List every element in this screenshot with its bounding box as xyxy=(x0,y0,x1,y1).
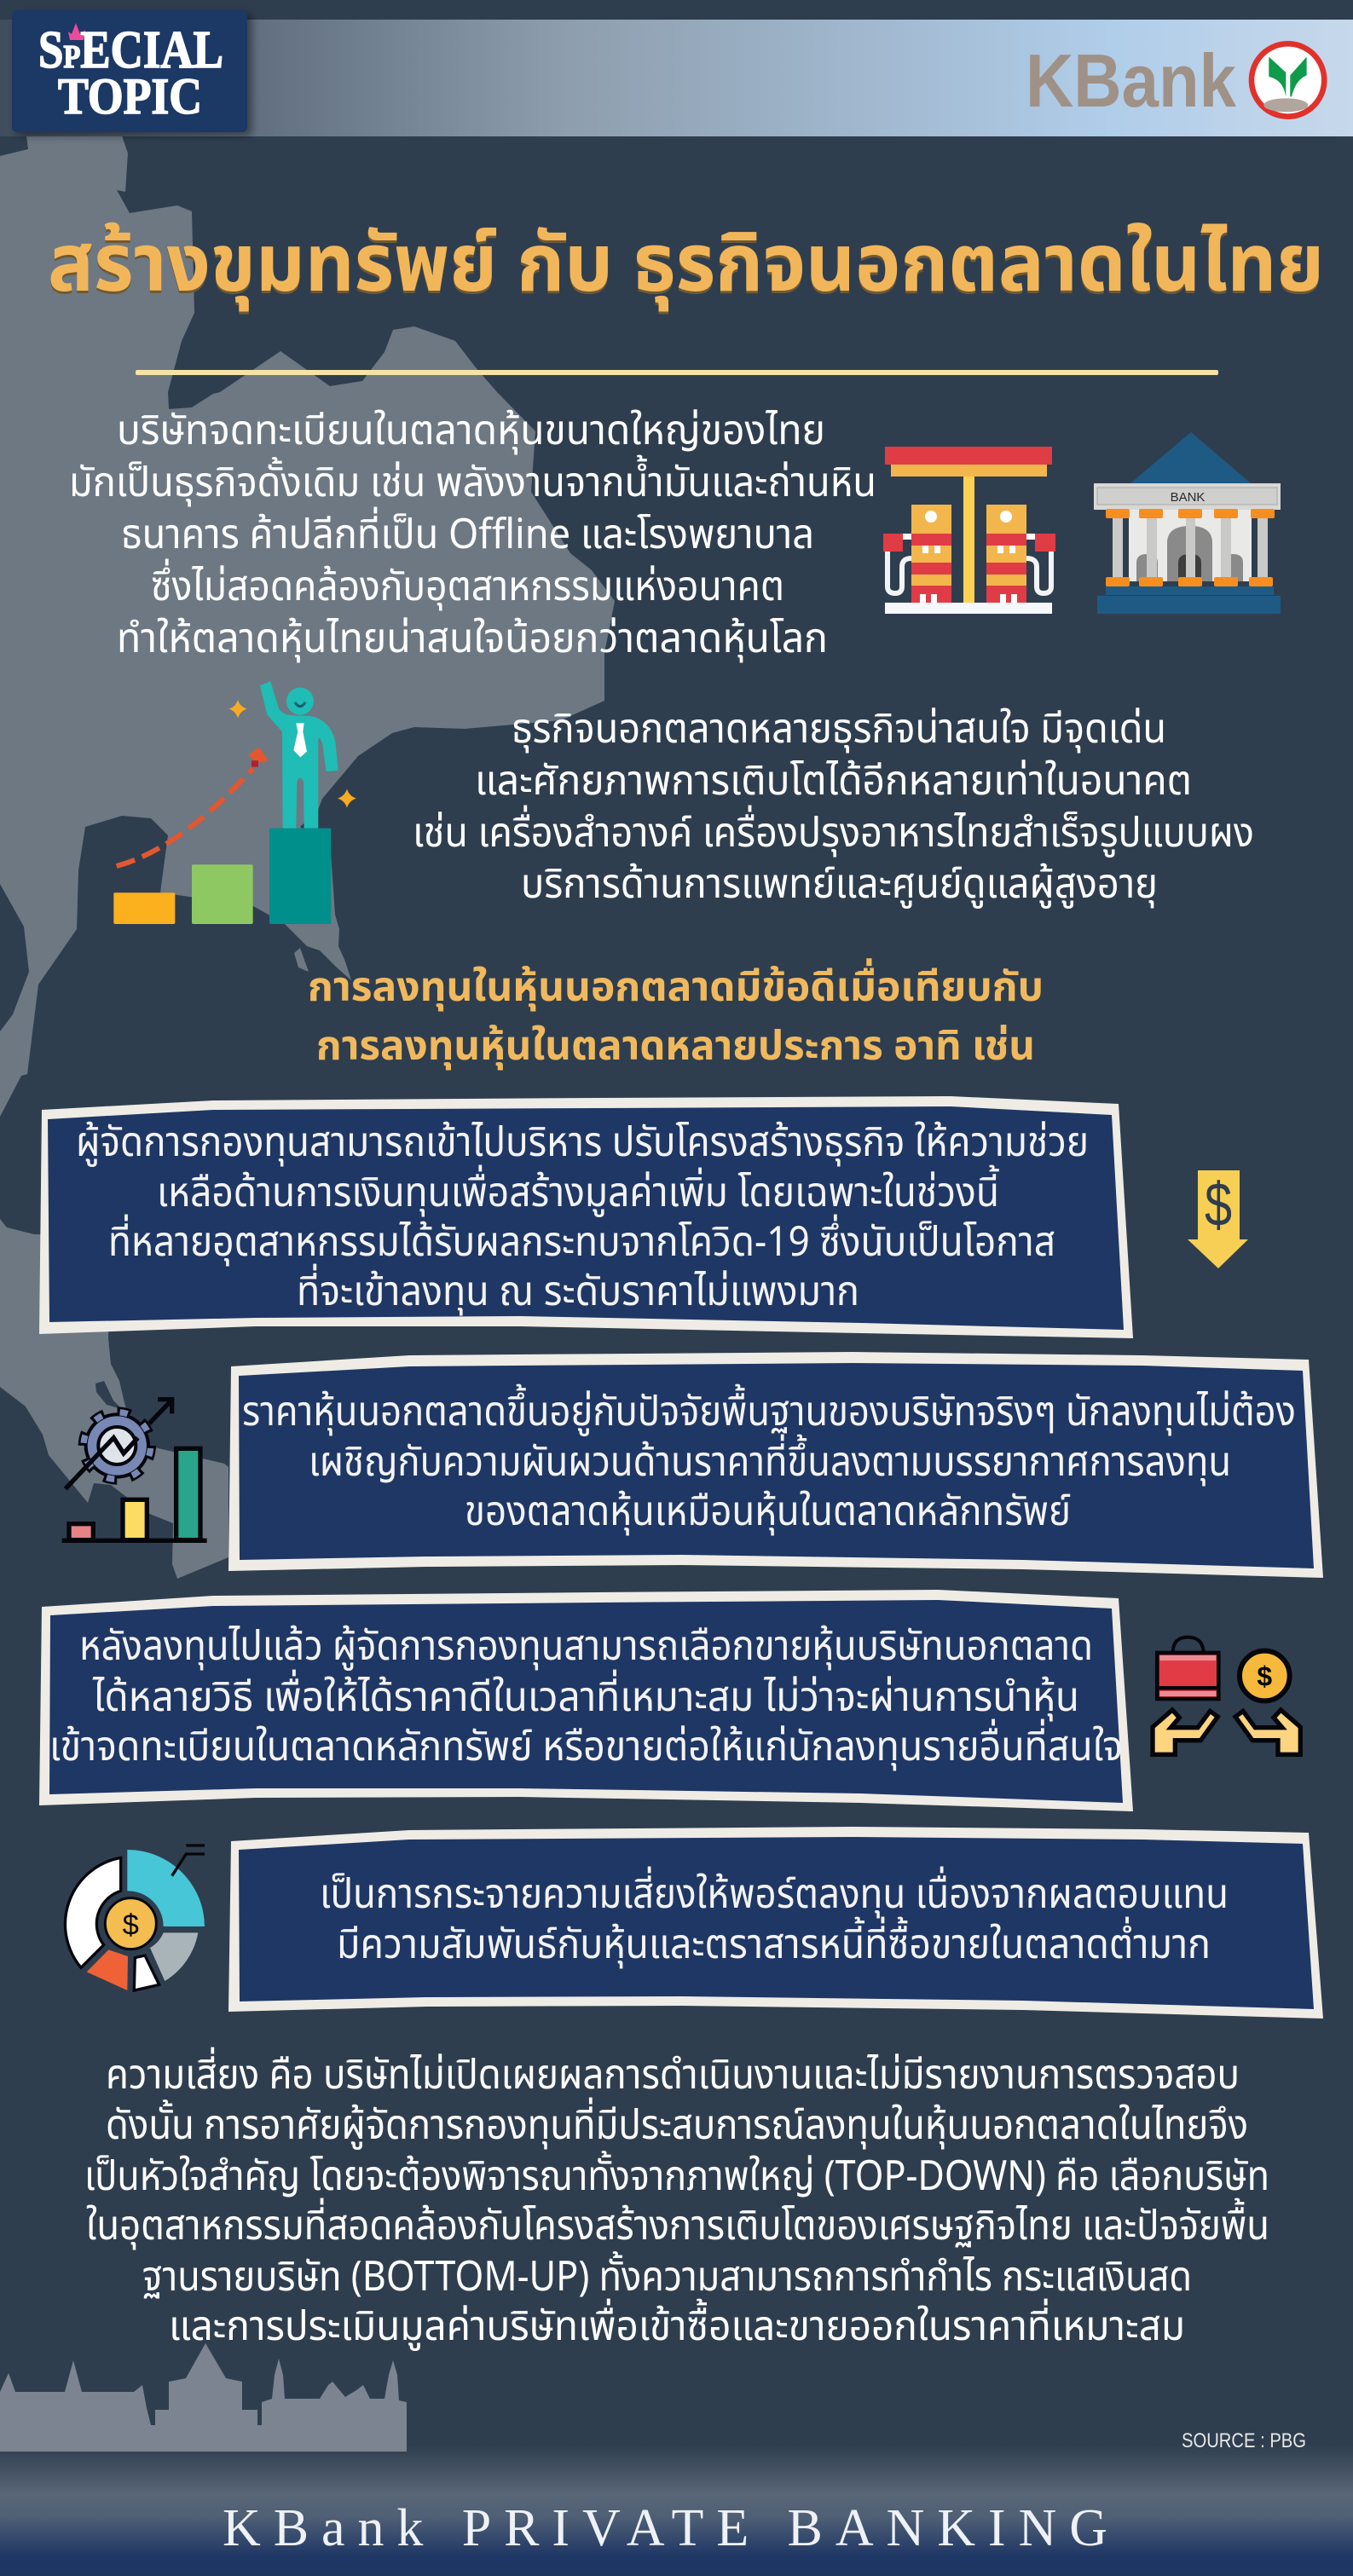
advantage 1 text xyxy=(76,1112,1089,1324)
source note: SOURCE : PBG xyxy=(1182,2429,1306,2452)
body paragraph: off-market businesses: ธุรกิจนอกตลาดหลายธุรกิจน่าสนใจ มีจุดเด่น xyxy=(512,699,1166,761)
closing paragraph: และการประเมินมูลค่าบริษัทเพื่อเข้าซื้อและขายออกในราคาที่เหมาะสม xyxy=(169,2296,1185,2359)
badge words xyxy=(38,21,223,124)
body paragraph: off-market businesses: และศักยภาพการเติบโตได้อีกหลายเท่าในอนาคต xyxy=(475,751,1192,813)
special topic badge xyxy=(12,10,247,132)
grey wedge xyxy=(150,1932,198,1981)
KBank logo: KBank xyxy=(1026,38,1237,123)
rising dashed arrow xyxy=(117,748,268,866)
coin centre: $ xyxy=(123,1909,139,1941)
icon: gas station xyxy=(883,447,1055,614)
skyline silhouette xyxy=(0,2343,407,2452)
growth chart with businessman illustration xyxy=(113,681,356,924)
advantage 2 text xyxy=(242,1382,1296,1544)
intro paragraph: ซึ่งไม่สอดคล้องกับอุตสาหกรรมแห่งอนาคต xyxy=(151,557,784,619)
subheading: การลงทุนหุ้นในตลาดหลายประการ อาทิ เช่น xyxy=(316,1016,1035,1078)
closing paragraph: ความเสี่ยง คือ บริษัทไม่เปิดเผยผลการดำเนินงานและไม่มีรายงานการตรวจสอบ xyxy=(106,2045,1240,2107)
advantage 1 text: ผู้จัดการกองทุนสามารถเข้าไปบริหาร ปรับโครงสร้างธุรกิจ ให้ความช่วย xyxy=(76,1112,1089,1175)
intro paragraph: มักเป็นธุรกิจดั้งเดิม เช่น พลังงานจากน้ำมันและถ่านหิน xyxy=(69,453,876,515)
advantage 3 text xyxy=(49,1616,1123,1779)
advantage 3 text: ได้หลายวิธี เพื่อให้ได้ราคาดีในเวลาที่เหมาะสม ไม่ว่าจะผ่านการนำหุ้น xyxy=(92,1667,1079,1730)
small white wedge xyxy=(134,1955,159,1990)
subheading: การลงทุนในหุ้นนอกตลาดมีข้อดีเมื่อเทียบกับ xyxy=(308,957,1044,1019)
closing paragraph xyxy=(84,2045,1269,2359)
icon: dollar down arrow: $ xyxy=(1205,1170,1232,1239)
logo emblem xyxy=(1252,43,1324,117)
coin centre xyxy=(105,1898,156,1949)
icon: dollar down arrow xyxy=(1188,1170,1248,1268)
footer brand: KBank PRIVATE BANKING xyxy=(223,2499,1107,2557)
gear xyxy=(84,1412,151,1479)
background map of Thailand xyxy=(0,128,615,1579)
intro paragraph xyxy=(69,401,876,671)
badge words: SPECIAL xyxy=(38,21,223,79)
advantage 1 text: เหลือด้านการเงินทุนเพื่อสร้างมูลค่าเพิ่ม โดยเฉพาะในช่วงนี้ xyxy=(157,1163,999,1225)
hands xyxy=(1153,1710,1300,1754)
panel: advantage 3 xyxy=(39,1590,1133,1811)
sparkles xyxy=(228,700,356,808)
callout tick xyxy=(172,1845,205,1876)
intro paragraph: บริษัทจดทะเบียนในตลาดหุ้นขนาดใหญ่ของไทย xyxy=(117,401,825,463)
crown xyxy=(68,23,85,40)
closing paragraph: ดังนั้น การอาศัยผู้จัดการกองทุนที่มีประสบการณ์ลงทุนในหุ้นนอกตลาดในไทยจึง xyxy=(106,2095,1248,2157)
title: สร้างขุมทรัพย์ กับ ธุรกิจนอกตลาดในไทย xyxy=(48,206,1324,327)
subheading xyxy=(308,957,1044,1078)
coin xyxy=(1240,1651,1290,1701)
intro paragraph: ทำให้ตลาดหุ้นไทยน่าสนใจน้อยกว่าตลาดหุ้นโลก xyxy=(117,609,828,671)
closing paragraph: ในอุตสาหกรรมที่สอดคล้องกับโครงสร้างการเติบโตของเศรษฐกิจไทย และปัจจัยพื้น xyxy=(86,2196,1269,2258)
icon: briefcase and coin in hands xyxy=(1153,1637,1300,1754)
body paragraph: off-market businesses: เช่น เครื่องสำอางค์ เครื่องปรุงอาหารไทยสำเร็จรูปแบบผง xyxy=(413,803,1254,865)
bars xyxy=(113,829,331,924)
teal wedge xyxy=(127,1850,205,1926)
footer gradient band xyxy=(0,2445,1353,2576)
icon: gear and bar chart xyxy=(62,1400,207,1540)
advantage 4 text: เป็นการกระจายความเสี่ยงให้พอร์ตลงทุน เนื่องจากผลตอบแทน xyxy=(320,1864,1229,1926)
body paragraph: off-market businesses xyxy=(413,699,1254,916)
icon: portfolio donut chart xyxy=(65,1845,205,1990)
advantage 2 text: ของตลาดหุ้นเหมือนหุ้นในตลาดหลักทรัพย์ xyxy=(465,1481,1071,1544)
businessman xyxy=(260,681,338,829)
trend arrow xyxy=(66,1400,172,1489)
advantage 1 text: ที่หลายอุตสาหกรรมได้รับผลกระทบจากโควิด-19 ซึ่งนับเป็นโอกาส xyxy=(108,1212,1055,1274)
panel: advantage 4 xyxy=(228,1827,1323,2019)
body paragraph: off-market businesses: บริการด้านการแพทย์และศูนย์ดูแลผู้สูงอายุ xyxy=(521,854,1158,916)
advantage 1 text: ที่จะเข้าลงทุน ณ ระดับราคาไม่แพงมาก xyxy=(297,1262,859,1324)
panel: advantage 1 xyxy=(39,1096,1133,1338)
dark coastal inlet on left edge xyxy=(0,884,29,1031)
dark finger of map inside chart icon area xyxy=(95,1381,122,1409)
header gradient band xyxy=(0,20,1353,136)
coin: $ xyxy=(1257,1661,1272,1691)
panel: advantage 2 xyxy=(228,1352,1323,1578)
icon: bank building xyxy=(1094,432,1281,614)
briefcase xyxy=(1157,1637,1218,1699)
orange wedge xyxy=(87,1949,128,1990)
bars xyxy=(62,1448,207,1540)
intro paragraph: ธนาคาร ค้าปลีกที่เป็น Offline และโรงพยาบาล xyxy=(121,505,814,567)
closing paragraph: ฐานรายบริษัท (BOTTOM-UP) ทั้งความสามารถการทำกำไร กระแสเงินสด xyxy=(142,2247,1192,2309)
large white wedge xyxy=(65,1857,121,1967)
badge words: TOPIC xyxy=(58,68,202,124)
icon: bank building: BANK xyxy=(1171,490,1205,505)
advantage 3 text: หลังลงทุนไปแล้ว ผู้จัดการกองทุนสามารถเลือกขายหุ้นบริษัทนอกตลาด xyxy=(79,1616,1093,1678)
advantage 3 text: เข้าจดทะเบียนในตลาดหลักทรัพย์ หรือขายต่อให้แก่นักลงทุนรายอื่นที่สนใจ xyxy=(49,1717,1123,1779)
advantage 4 text xyxy=(320,1864,1229,1977)
advantage 4 text: มีความสัมพันธ์กับหุ้นและตราสารหนี้ที่ซื้อขายในตลาดต่ำมาก xyxy=(337,1915,1211,1977)
advantage 2 text: เผชิญกับความผันผวนด้านราคาที่ขึ้นลงตามบรรยากาศการลงทุน xyxy=(309,1432,1231,1494)
